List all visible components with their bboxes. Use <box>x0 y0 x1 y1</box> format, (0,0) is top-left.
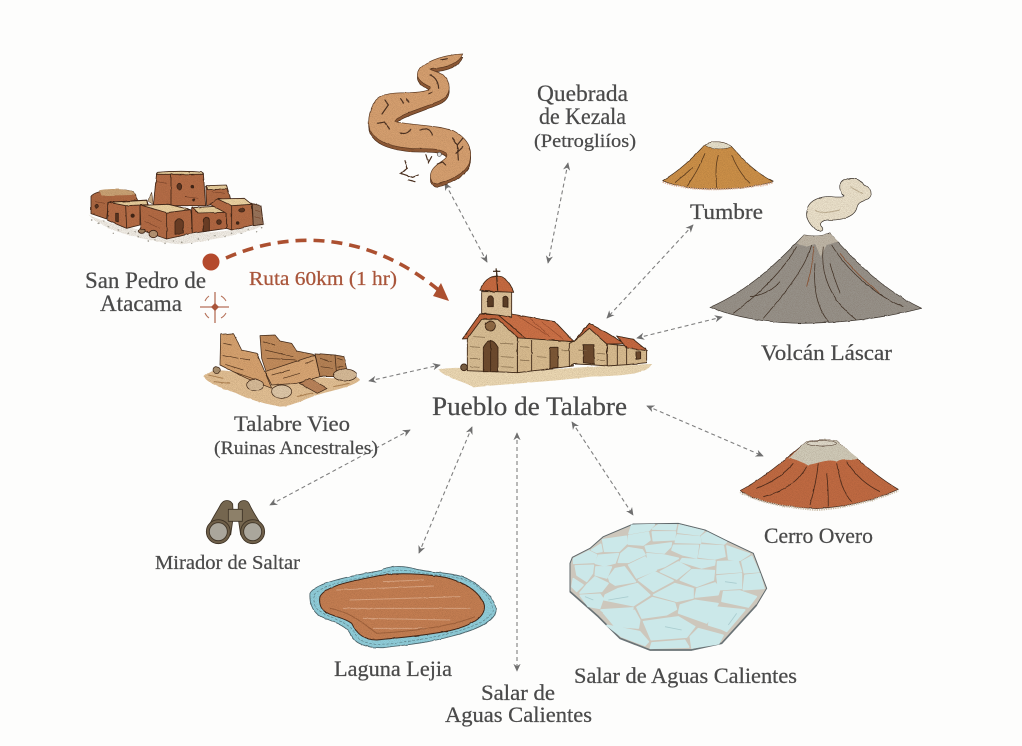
label: Talabre Viejo <box>214 411 378 459</box>
label: Salar de Aguas Calientes (center): Aguas Calientes <box>445 702 592 727</box>
label: San Pedro de Atacama: San Pedro de <box>85 268 206 293</box>
route label: Ruta 60km (1 hr) <box>249 268 397 290</box>
petroglyph marks <box>377 59 463 182</box>
label: Talabre Viejo: Talabre Vieo <box>234 411 350 436</box>
label: San Pedro de Atacama <box>85 268 206 316</box>
label: Tumbre: Tumbre <box>690 199 763 224</box>
icon: salar salt flat <box>570 523 767 650</box>
icon: Laguna Lejia <box>310 567 496 648</box>
label: Salar de Aguas Calientes (center): Salar de <box>481 680 555 705</box>
label: Salar de Aguas Calientes (right): Salar de Aguas Calientes <box>574 663 797 688</box>
label: Cerro Overo: Cerro Overo <box>764 523 873 548</box>
icon: Talabre Viejo ruins <box>203 333 360 407</box>
label: Quebrada de Kezala: Quebrada <box>537 81 628 106</box>
icon: petroglyph canyon <box>369 54 471 187</box>
label: Volcán Láscar: Volcán Láscar <box>761 340 893 365</box>
icon: Tumbre volcano <box>663 142 773 189</box>
label: Laguna Lejia: Laguna Lejia <box>334 656 452 681</box>
icon: Cerro Overo <box>740 440 898 510</box>
salt crust cells <box>572 525 764 648</box>
label: Quebrada de Kezala <box>534 81 636 152</box>
label: Mirador de Saltar: Mirador de Saltar <box>155 552 300 574</box>
icon: binoculars <box>206 500 265 544</box>
icon: compass rose <box>200 292 229 323</box>
icon: Láscar volcano with smoke <box>710 178 922 323</box>
label: Quebrada de Kezala: (Petrogliíos) <box>534 131 636 152</box>
route arrow <box>226 240 449 301</box>
icon: church of Talabre <box>438 268 652 387</box>
label: Quebrada de Kezala: de Kezala <box>539 104 626 129</box>
icon: San Pedro adobe village <box>88 171 267 244</box>
label: San Pedro de Atacama: Atacama <box>100 291 182 316</box>
label: Salar de Aguas Calientes (center) <box>445 680 592 727</box>
label: Talabre Viejo: (Ruinas Ancestrales) <box>214 438 378 459</box>
label: Pueblo de Talabre: Pueblo de Talabre <box>432 392 627 421</box>
route origin marker <box>202 254 220 270</box>
connector arrows <box>270 163 763 671</box>
